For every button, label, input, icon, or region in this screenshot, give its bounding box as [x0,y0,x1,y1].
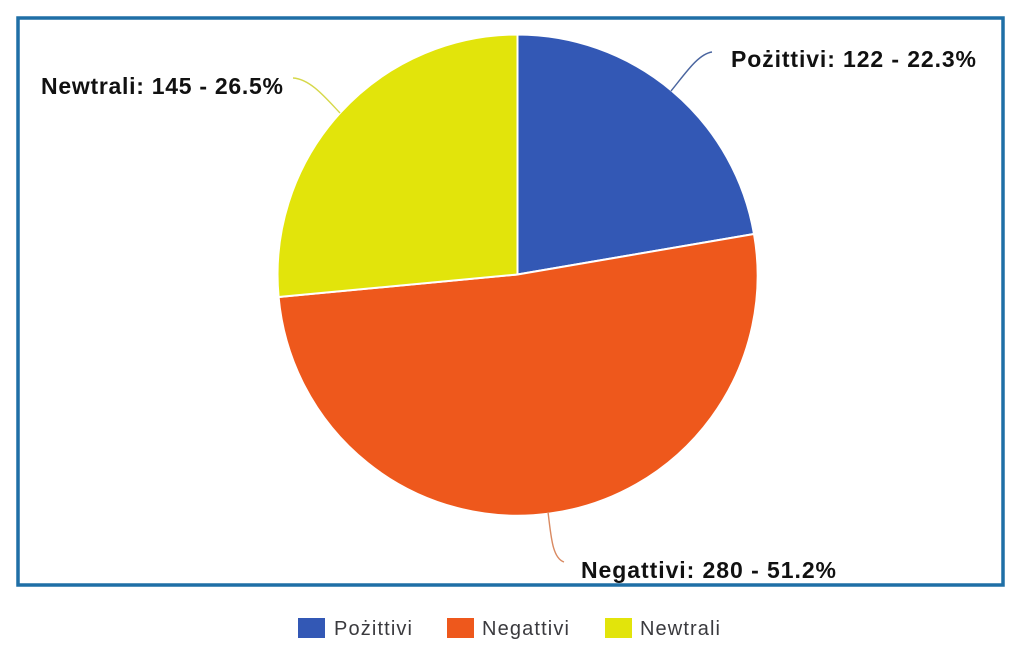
legend text: Newtrali: Newtrali [640,618,720,640]
slice: Pożittivi 22.3% [518,34,754,274]
leader line: Newtrali [293,78,340,113]
label: Newtrali: Newtrali: 145 - 26.5% [41,73,283,99]
legend text: Negattivi: Negattivi [482,618,569,640]
legend text: Pożittivi: Pożittivi [334,618,412,640]
leader line: Negattivi [548,512,564,562]
label: Pożittivi: Pożittivi: 122 - 22.3% [731,46,976,72]
legend swatch: Pożittivi [298,618,325,638]
pie chart [278,34,758,516]
label: Negattivi: Negattivi: 280 - 51.2% [581,557,836,583]
legend [298,618,720,640]
legend swatch: Negattivi [447,618,474,638]
slice: Negattivi 51.2% [279,234,758,516]
leader line: Pożittivi [671,52,712,91]
slice: Newtrali 26.5% [278,34,518,297]
legend swatch: Newtrali [605,618,632,638]
